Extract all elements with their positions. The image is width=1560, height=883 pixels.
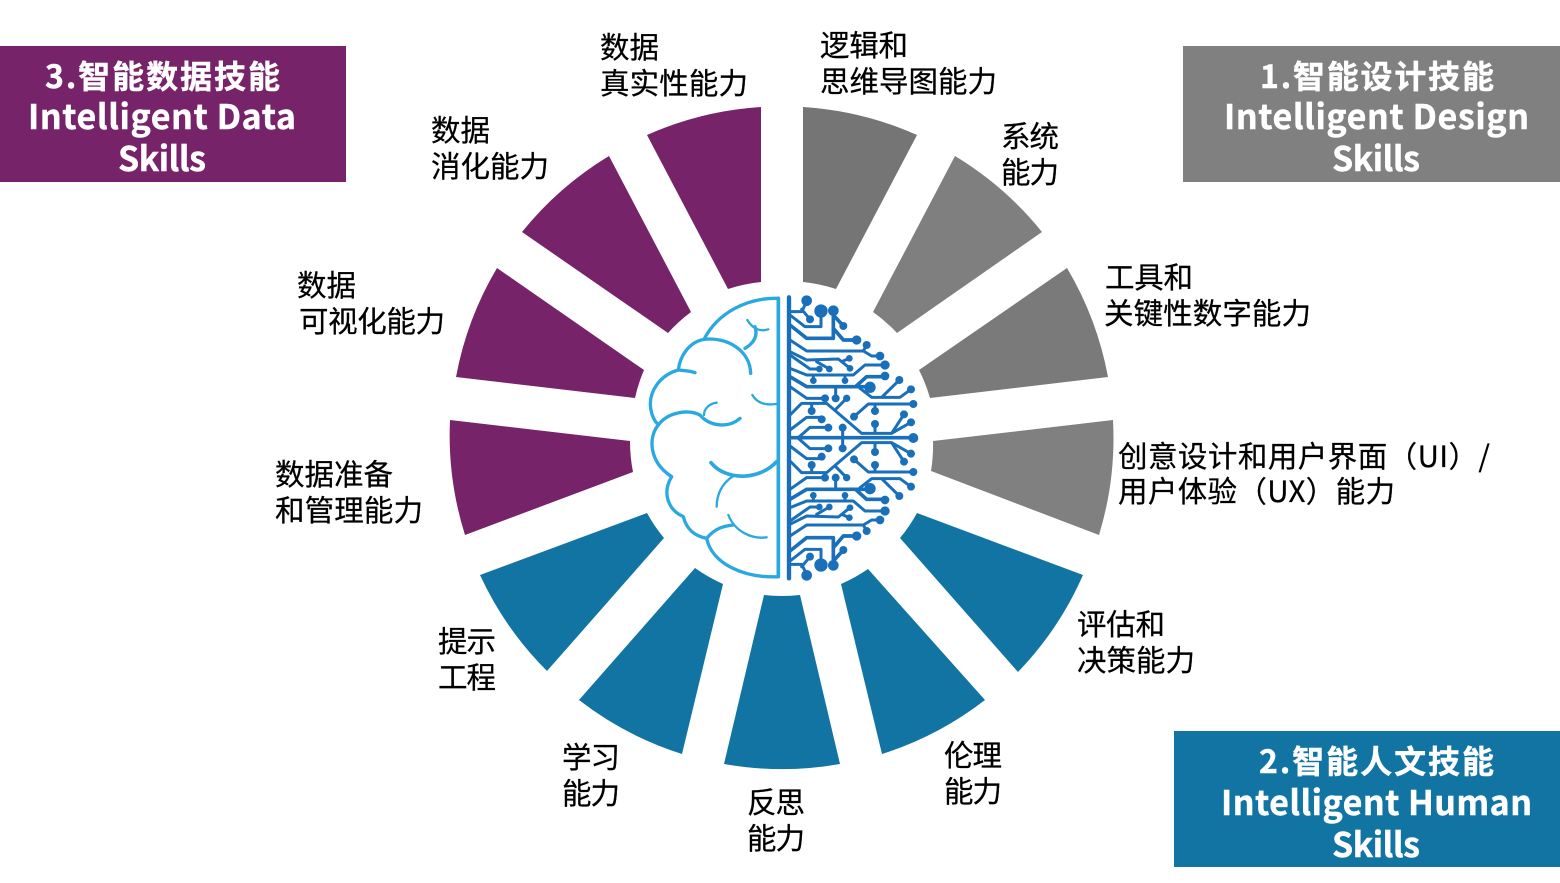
panel: Intelligent Design Skills: Skills <box>1332 132 1420 181</box>
label: ethics: 伦理 <box>944 733 1002 775</box>
label: learning: 能力 <box>562 771 620 813</box>
label: data preparation <box>275 452 423 530</box>
label: data visualization: 可视化能力 <box>299 299 445 341</box>
label: logic and mind mapping <box>820 23 997 101</box>
label: data digestion: 数据 <box>431 108 490 150</box>
wedge: evaluation <box>900 513 1083 672</box>
label: data digestion <box>431 108 549 186</box>
label: evaluation <box>1077 602 1195 680</box>
label: data visualization: 数据 <box>297 263 356 305</box>
wedge: creative UI UX <box>931 420 1113 535</box>
label: data preparation: 和管理能力 <box>275 488 423 530</box>
label: data visualization <box>297 263 445 341</box>
label: ethics <box>944 733 1002 811</box>
label: systems: 能力 <box>1001 150 1059 192</box>
panel: Intelligent Human Skills: Intelligent Human <box>1221 776 1532 825</box>
wedge ring <box>450 107 1113 769</box>
label: prompt engineering: 提示 <box>438 619 496 661</box>
label: creative UI UX <box>1118 434 1490 511</box>
label: evaluation: 评估和 <box>1077 602 1165 644</box>
wedge: data preparation <box>450 420 633 535</box>
wedge: reflection <box>724 595 840 769</box>
label: data preparation: 数据准备 <box>275 452 393 494</box>
wedge: data visualization <box>456 268 644 398</box>
wedge: logic and mind mapping <box>803 107 917 289</box>
label: reflection: 能力 <box>747 816 805 858</box>
icon: circuit half <box>789 295 918 581</box>
label: logic and mind mapping: 思维导图能力 <box>820 59 997 101</box>
label: data authenticity: 真实性能力 <box>600 61 748 103</box>
label: data authenticity: 数据 <box>600 25 659 67</box>
label: tools and digital: 关键性数字能力 <box>1104 291 1311 333</box>
label: learning: 学习 <box>562 735 620 777</box>
circuit lower half <box>790 438 917 581</box>
circuit upper half <box>790 295 918 443</box>
wedge: ethics <box>841 569 985 754</box>
panel: Intelligent Data Skills: 3.智能数据技能 <box>45 52 280 98</box>
label: prompt engineering <box>438 619 496 697</box>
label: systems: 系统 <box>1001 114 1059 156</box>
panel: Intelligent Data Skills <box>0 46 346 182</box>
label: data digestion: 消化能力 <box>431 144 549 186</box>
label: systems <box>1001 114 1059 192</box>
icon: brain half <box>650 298 778 577</box>
label: reflection: 反思 <box>747 780 805 822</box>
wedge: tools and digital <box>919 268 1108 398</box>
panel: Intelligent Data Skills: Skills <box>118 132 206 181</box>
panel: Intelligent Design Skills: 1.智能设计技能 <box>1260 52 1494 98</box>
panel: Intelligent Human Skills: 2.智能人文技能 <box>1259 737 1494 783</box>
label: creative UI UX: 用户体验（UX）能力 <box>1118 469 1395 511</box>
panel: Intelligent Design Skills <box>1183 46 1560 182</box>
wedge: prompt engineering <box>480 513 664 671</box>
wedge: data digestion <box>522 156 691 333</box>
label: learning <box>562 735 620 813</box>
label: ethics: 能力 <box>944 769 1002 811</box>
label: creative UI UX: 创意设计和用户界面（UI）/ <box>1118 434 1490 476</box>
label: tools and digital <box>1104 255 1311 333</box>
label: evaluation: 决策能力 <box>1077 638 1195 680</box>
wedge: systems <box>873 156 1042 333</box>
label: logic and mind mapping: 逻辑和 <box>820 23 908 65</box>
label: data authenticity <box>600 25 748 103</box>
wedge: data authenticity <box>647 107 761 289</box>
label: reflection <box>747 780 805 858</box>
panel: Intelligent Human Skills: Skills <box>1332 818 1420 867</box>
label: tools and digital: 工具和 <box>1105 255 1193 297</box>
panel: Intelligent Human Skills <box>1174 731 1560 867</box>
panel: Intelligent Data Skills: Intelligent Data <box>28 90 296 139</box>
panel: Intelligent Design Skills: Intelligent Design <box>1224 90 1529 139</box>
wedge: learning <box>579 568 723 754</box>
label: prompt engineering: 工程 <box>438 655 496 697</box>
